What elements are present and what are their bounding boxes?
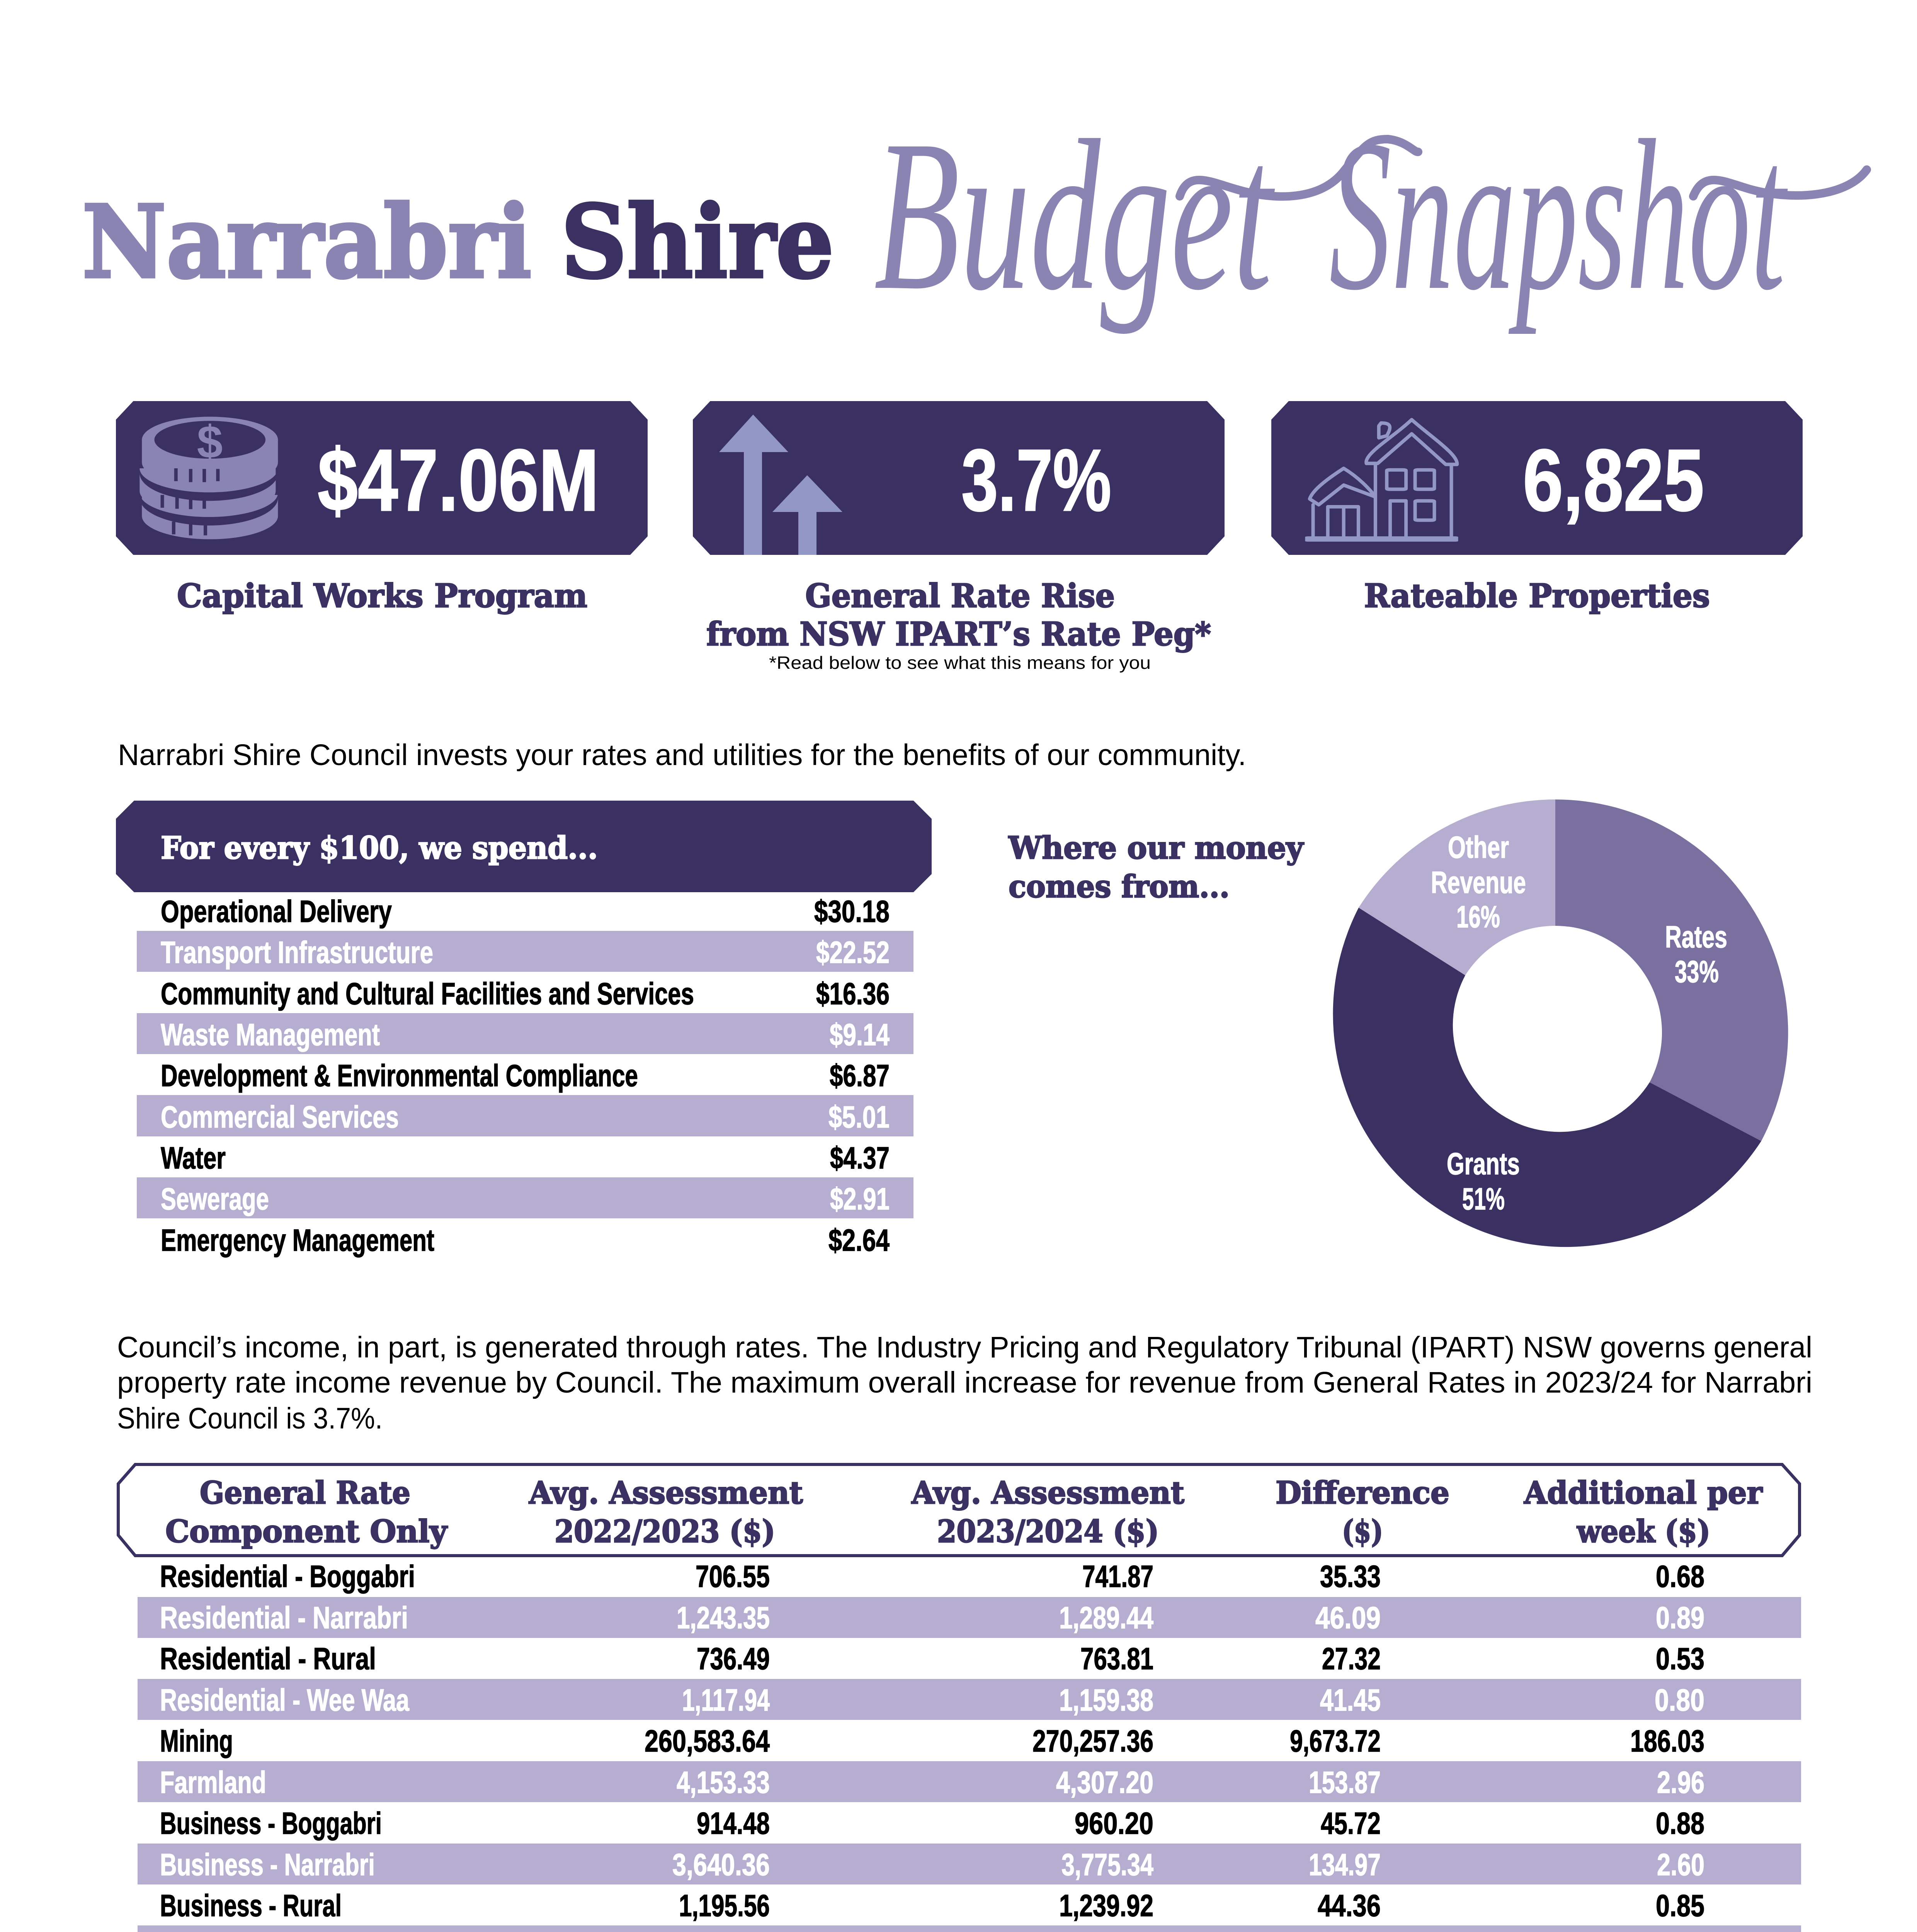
row: Residential - Boggabri: Residential - Boggabri xyxy=(160,1559,415,1594)
panel: general rate table xyxy=(118,1464,1801,1932)
row: Business - Rural: 1,195.56 xyxy=(679,1888,770,1923)
segment: Rates 33%: 33% xyxy=(1675,954,1719,989)
row: Residential - Narrabri: 1,289.44 xyxy=(1059,1600,1153,1635)
row: Business - Rural xyxy=(160,1888,1704,1923)
row: Business - Rural: Business - Rural xyxy=(160,1888,342,1923)
segment: Grants 51% xyxy=(1333,908,1761,1247)
intro text: Narrabri Shire Council invests your rates and utilities for the benefits of our community. xyxy=(118,738,1246,772)
row: Business - Wee Waa xyxy=(138,1925,1801,1932)
icon: up arrows xyxy=(719,415,842,555)
icon: coin stack xyxy=(139,416,278,539)
row: Mining: 270,257.36 xyxy=(1032,1724,1153,1758)
row: Business - Boggabri: 45.72 xyxy=(1321,1806,1381,1840)
row: Residential - Rural: Residential - Rural xyxy=(160,1641,376,1676)
title xyxy=(82,95,1867,335)
segment: Grants 51%: Grants xyxy=(1447,1146,1520,1181)
row: Transport Infrastructure: Transport Infrastructure xyxy=(161,935,433,969)
paragraph: IPART explanation: Shire Council is 3.7%. xyxy=(117,1402,383,1435)
row: Farmland: 153.87 xyxy=(1309,1765,1381,1799)
table header: 2022/2023 ($) xyxy=(555,1513,775,1549)
caption: General Rate Rise xyxy=(706,577,1211,673)
row: Residential - Narrabri: 1,243.35 xyxy=(677,1600,770,1635)
row: Business - Narrabri xyxy=(138,1844,1801,1884)
panel: for every $100 we spend xyxy=(116,801,932,1257)
title: Budget Snapshot script xyxy=(874,95,1867,335)
row: Emergency Management: $2.64 xyxy=(828,1223,890,1257)
row: Residential - Boggabri: 0.68 xyxy=(1656,1559,1704,1594)
row: Farmland: 4,153.33 xyxy=(677,1765,770,1799)
row: Residential - Rural: 736.49 xyxy=(697,1641,770,1676)
row: Business - Boggabri: 914.48 xyxy=(697,1806,770,1840)
heading bar xyxy=(116,801,932,892)
row: Residential - Rural: 763.81 xyxy=(1080,1641,1153,1676)
row: Business - Rural: 44.36 xyxy=(1318,1888,1381,1923)
title: Narrabri Shire: Shire xyxy=(561,184,834,301)
row: Residential - Rural xyxy=(160,1641,1704,1676)
row: Residential - Boggabri xyxy=(160,1559,1704,1594)
row: Development & Environmental Compliance: $6.87 xyxy=(830,1058,890,1093)
row: Community and Cultural Facilities and Services: $16.36 xyxy=(816,976,890,1011)
row: Residential - Wee Waa: 1,159.38 xyxy=(1059,1683,1153,1717)
row: Business - Narrabri: 2.60 xyxy=(1657,1847,1704,1882)
table header xyxy=(118,1464,1800,1556)
row: Operational Delivery xyxy=(161,894,890,929)
row: Residential - Wee Waa xyxy=(138,1679,1801,1720)
row: Residential - Boggabri: 741.87 xyxy=(1082,1559,1153,1594)
caption: General Rate Rise: from NSW IPART’s Rate Peg* xyxy=(706,615,1211,653)
icon: coin stack: $ xyxy=(197,416,223,468)
row: Business - Boggabri: 960.20 xyxy=(1075,1806,1153,1840)
row: Sewerage: $2.91 xyxy=(830,1182,890,1216)
segment: Other Revenue 16%: Revenue xyxy=(1431,865,1526,900)
segment: Other Revenue 16%: 16% xyxy=(1456,900,1500,934)
row: Commercial Services: $5.01 xyxy=(828,1100,890,1134)
row: Residential - Narrabri: 46.09 xyxy=(1315,1600,1381,1635)
row: Business - Rural: 1,239.92 xyxy=(1059,1888,1153,1923)
row: Sewerage: Sewerage xyxy=(161,1182,269,1216)
row: Residential - Boggabri: 706.55 xyxy=(696,1559,770,1594)
table header: Additional per xyxy=(1524,1475,1763,1511)
row: Mining: 260,583.64 xyxy=(645,1724,770,1758)
panel: general rate rise stat xyxy=(693,401,1225,555)
segment: Grants 51%: 51% xyxy=(1462,1182,1505,1216)
row: Residential - Rural: 0.53 xyxy=(1656,1641,1704,1676)
table header: ($) xyxy=(1342,1513,1383,1549)
row: Water xyxy=(161,1141,890,1175)
paragraph: IPART explanation xyxy=(117,1331,1812,1435)
table header: Avg. Assessment xyxy=(529,1475,803,1511)
row: Waste Management xyxy=(137,1013,913,1054)
caption: Rateable Properties: Rateable Properties xyxy=(1364,577,1710,615)
stat: 3.7%: 3.7% xyxy=(961,432,1111,529)
paragraph: IPART explanation: property rate income revenue by Council. The maximum overall increase for revenue from General Rates in 2023/24 for Narrabri xyxy=(117,1366,1812,1399)
row: Sewerage xyxy=(137,1177,913,1218)
row: Business - Narrabri: 3,640.36 xyxy=(672,1847,770,1882)
row: Farmland: 2.96 xyxy=(1657,1765,1704,1799)
row: Residential - Narrabri: 0.89 xyxy=(1656,1600,1704,1635)
row: Operational Delivery: Operational Delivery xyxy=(161,894,392,929)
panel: rateable properties stat xyxy=(1271,401,1803,555)
table header: Avg. Assessment xyxy=(911,1475,1184,1511)
paragraph: IPART explanation: Council’s income, in part, is generated through rates. The Industry Pricing and Regulatory Tribunal (IPART) NSW governs general xyxy=(117,1331,1812,1364)
row: Residential - Boggabri: 35.33 xyxy=(1320,1559,1381,1594)
row: Farmland xyxy=(138,1761,1801,1802)
heading: Where our money comes from: comes from... xyxy=(1009,868,1230,905)
row: Mining: 9,673.72 xyxy=(1290,1724,1381,1758)
heading: Where our money comes from xyxy=(1008,830,1304,905)
row: Residential - Wee Waa: 1,117.94 xyxy=(682,1683,770,1717)
row: Residential - Wee Waa: Residential - Wee Waa xyxy=(160,1683,409,1717)
table header: Difference xyxy=(1276,1475,1449,1511)
row: Waste Management: Waste Management xyxy=(161,1017,380,1052)
stat: 6,825: 6,825 xyxy=(1523,432,1704,529)
row: Business - Rural: 0.85 xyxy=(1656,1888,1704,1923)
segment: Other Revenue 16% xyxy=(1359,799,1555,975)
heading: Where our money comes from: Where our money xyxy=(1008,830,1304,866)
row: Mining xyxy=(160,1724,1704,1758)
row: Transport Infrastructure: $22.52 xyxy=(816,935,890,969)
row: Emergency Management: Emergency Management xyxy=(161,1223,434,1257)
row: Water: $4.37 xyxy=(830,1141,890,1175)
caption: Capital Works Program: Capital Works Program xyxy=(177,577,587,615)
row: Commercial Services xyxy=(137,1095,913,1136)
title: Narrabri Shire xyxy=(82,184,834,301)
row: Residential - Wee Waa: 41.45 xyxy=(1320,1683,1381,1717)
caption: General Rate Rise: *Read below to see what this means for you xyxy=(769,653,1151,673)
segment: Rates 33% xyxy=(1555,799,1788,1141)
heading bar: For every $100, we spend... xyxy=(161,830,598,866)
row: Business - Narrabri: 134.97 xyxy=(1309,1847,1381,1882)
row: Residential - Narrabri xyxy=(138,1597,1801,1638)
row: Water: Water xyxy=(161,1141,226,1175)
stat: $47.06M: $47.06M xyxy=(318,432,599,529)
row: Emergency Management xyxy=(161,1223,890,1257)
row: Mining: Mining xyxy=(160,1724,233,1758)
row: Development & Environmental Compliance: Development & Environmental Compliance xyxy=(161,1058,638,1093)
row: Community and Cultural Facilities and Services: Community and Cultural Facilities and Services xyxy=(161,976,694,1011)
row: Business - Narrabri: 3,775.34 xyxy=(1061,1847,1153,1882)
row: Operational Delivery: $30.18 xyxy=(814,894,890,929)
row: Farmland: Farmland xyxy=(160,1765,266,1799)
row: Business - Narrabri: Business - Narrabri xyxy=(160,1847,375,1882)
row: Business - Boggabri: 0.88 xyxy=(1656,1806,1704,1840)
panel: capital works stat xyxy=(116,401,648,555)
row: Transport Infrastructure xyxy=(137,931,913,972)
row: Commercial Services: Commercial Services xyxy=(161,1100,399,1134)
row: Farmland: 4,307.20 xyxy=(1056,1765,1153,1799)
row: Business - Boggabri: Business - Boggabri xyxy=(160,1806,382,1840)
row: Business - Boggabri xyxy=(160,1806,1704,1840)
table header: Component Only xyxy=(165,1513,448,1549)
icon: houses xyxy=(1305,420,1458,542)
table header: week ($) xyxy=(1577,1513,1710,1549)
row: Waste Management: $9.14 xyxy=(830,1017,890,1052)
segment: Other Revenue 16%: Other xyxy=(1448,830,1509,864)
row: Residential - Rural: 27.32 xyxy=(1322,1641,1381,1676)
caption: General Rate Rise: General Rate Rise xyxy=(805,577,1115,615)
donut chart: income sources xyxy=(1333,799,1788,1247)
row: Residential - Narrabri: Residential - Narrabri xyxy=(160,1600,408,1635)
title: Narrabri Shire: Narrabri xyxy=(82,184,532,301)
title: Budget Snapshot script: Budget xyxy=(874,95,1277,335)
segment: Rates 33%: Rates xyxy=(1665,920,1727,954)
table header: 2023/2024 ($) xyxy=(937,1513,1159,1549)
table header: General Rate xyxy=(200,1475,410,1511)
row: Residential - Wee Waa: 0.80 xyxy=(1655,1683,1704,1717)
row: Mining: 186.03 xyxy=(1630,1724,1704,1758)
